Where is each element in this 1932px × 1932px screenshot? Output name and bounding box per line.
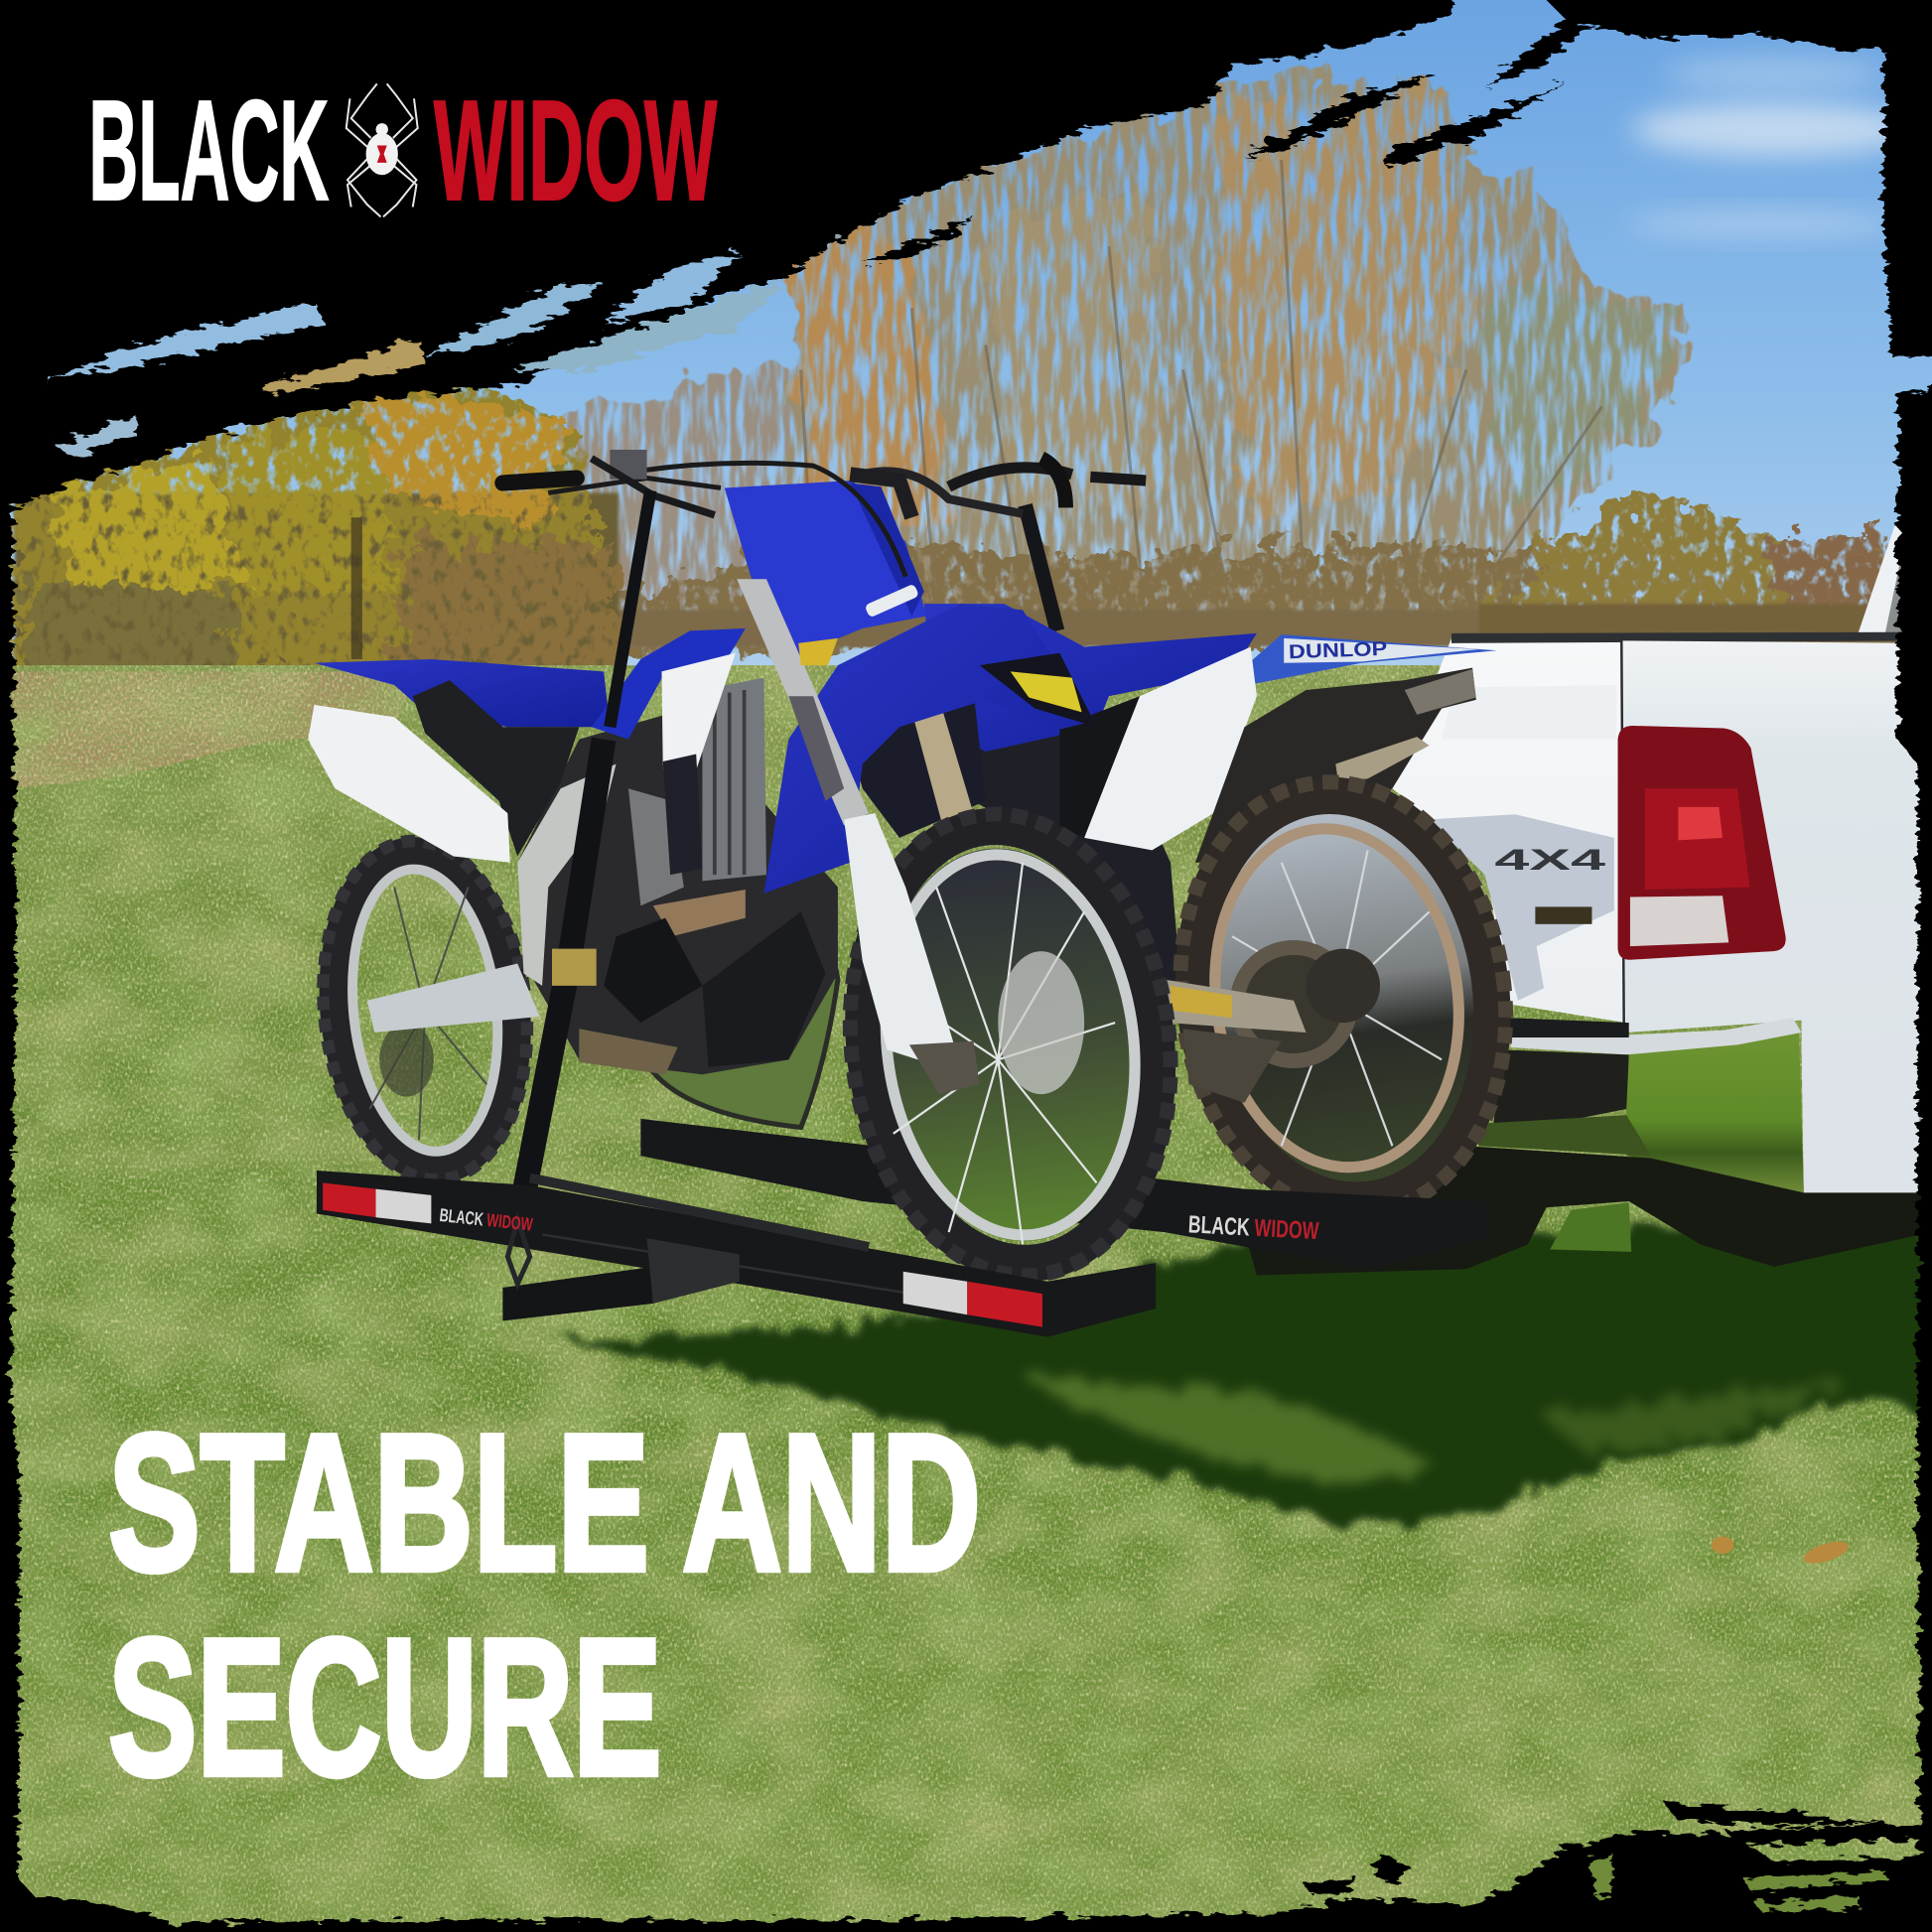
right reflector bbox=[903, 1272, 1042, 1327]
safety chain bbox=[507, 1220, 530, 1284]
main bike radiator bbox=[702, 678, 766, 881]
dark frame between the wheels bbox=[961, 690, 1182, 1011]
rear rack bar bbox=[640, 1119, 1488, 1269]
chrome bumper reflection bbox=[1626, 1033, 1804, 1192]
torn border: bottom bbox=[0, 1831, 1932, 1932]
rear bike tail bbox=[1232, 634, 1497, 684]
rear bike muffler bbox=[1195, 668, 1476, 863]
torn border: right bbox=[1882, 37, 1932, 1932]
main bike side plate bbox=[308, 705, 510, 863]
rear bike swingarm bbox=[1165, 980, 1307, 1033]
background: grass field bbox=[0, 665, 1932, 1932]
truck bed bbox=[1392, 632, 1932, 1023]
rear bike (second motorcycle) bbox=[924, 459, 1533, 1235]
rear bike side panel bbox=[1084, 647, 1257, 850]
front rack bar bbox=[317, 1171, 1156, 1337]
tail light bbox=[1618, 726, 1786, 960]
low treeline bbox=[617, 542, 1897, 653]
fallen leaves bbox=[1712, 1537, 1851, 1568]
main bike far-side wheel bbox=[653, 918, 838, 1128]
headline line two: SECURE bbox=[108, 1597, 661, 1816]
grass flecks over bottom right corner bbox=[1589, 1855, 1885, 1912]
main bike fork guard bbox=[844, 813, 955, 1059]
ratchet strap bbox=[523, 490, 650, 1195]
left reflector bbox=[323, 1182, 431, 1223]
rear rack bar: BLACK WIDOW bbox=[1187, 1211, 1319, 1245]
rear bike tank and seat bbox=[924, 604, 1257, 752]
main bike swingarm bbox=[367, 964, 540, 1033]
hitch and underside bbox=[1506, 1018, 1629, 1037]
main bike rear wheel bbox=[307, 831, 543, 1190]
main bike shroud bbox=[592, 628, 746, 740]
main bike front wheel bbox=[824, 795, 1196, 1295]
rear bike (second motorcycle): DUNLOP bbox=[1289, 638, 1388, 663]
rear bike wheel bbox=[1153, 760, 1533, 1235]
main bike handlebars bbox=[502, 450, 1023, 577]
sky streaks inside banner bbox=[43, 252, 788, 456]
main bike engine bbox=[517, 715, 838, 1074]
main bike fork tube bbox=[737, 579, 869, 826]
torn corner: top right bbox=[1522, 0, 1932, 52]
tailgate side bbox=[1621, 640, 1932, 1192]
main bike airbox bbox=[413, 680, 579, 857]
logo: BLACK bbox=[88, 70, 329, 230]
torn border: left bbox=[0, 469, 37, 1932]
rear bike handlebar and strap bbox=[1026, 505, 1057, 630]
logo word: WIDOW: WIDOW bbox=[434, 70, 717, 230]
right hedge trees bbox=[1478, 492, 1885, 634]
torn bottom right streaks bbox=[1307, 1801, 1932, 1895]
ground shadow of rack and truck bbox=[561, 1213, 1932, 1528]
truck bbox=[1244, 499, 1932, 1276]
truck lower body bbox=[1801, 1029, 1932, 1192]
background: autumn trees bbox=[12, 73, 1897, 678]
rack tray rail bbox=[530, 1177, 869, 1247]
torn brush stroke: top banner bbox=[0, 0, 1472, 517]
truck cab bbox=[1859, 499, 1932, 638]
left autumn tree bbox=[15, 492, 619, 678]
main bike rear fender and seat bbox=[314, 659, 610, 727]
truck bed: 4X4 bbox=[1494, 844, 1606, 877]
main bike underside of fender bbox=[838, 690, 986, 838]
front bike (main motorcycle) bbox=[307, 450, 1196, 1295]
icon: spider bbox=[346, 83, 418, 216]
main bike number plate bbox=[725, 481, 926, 659]
tall bare tree foliage bbox=[554, 73, 1688, 640]
sunlit patch inside shadow bbox=[1023, 1375, 1436, 1483]
headline line one: STABLE AND bbox=[108, 1393, 981, 1611]
hitch plate bbox=[647, 1238, 740, 1304]
front rack bar: BLACK WIDOW bbox=[439, 1204, 534, 1235]
main bike sticker panel bbox=[663, 755, 702, 875]
torn streaks near banner bbox=[863, 12, 1601, 265]
main bike front fender bbox=[763, 604, 1094, 894]
chrome bumper top strip bbox=[1511, 1018, 1801, 1054]
headline bbox=[108, 1393, 981, 1816]
background: sky bbox=[0, 0, 1932, 788]
branches bbox=[801, 160, 1601, 628]
